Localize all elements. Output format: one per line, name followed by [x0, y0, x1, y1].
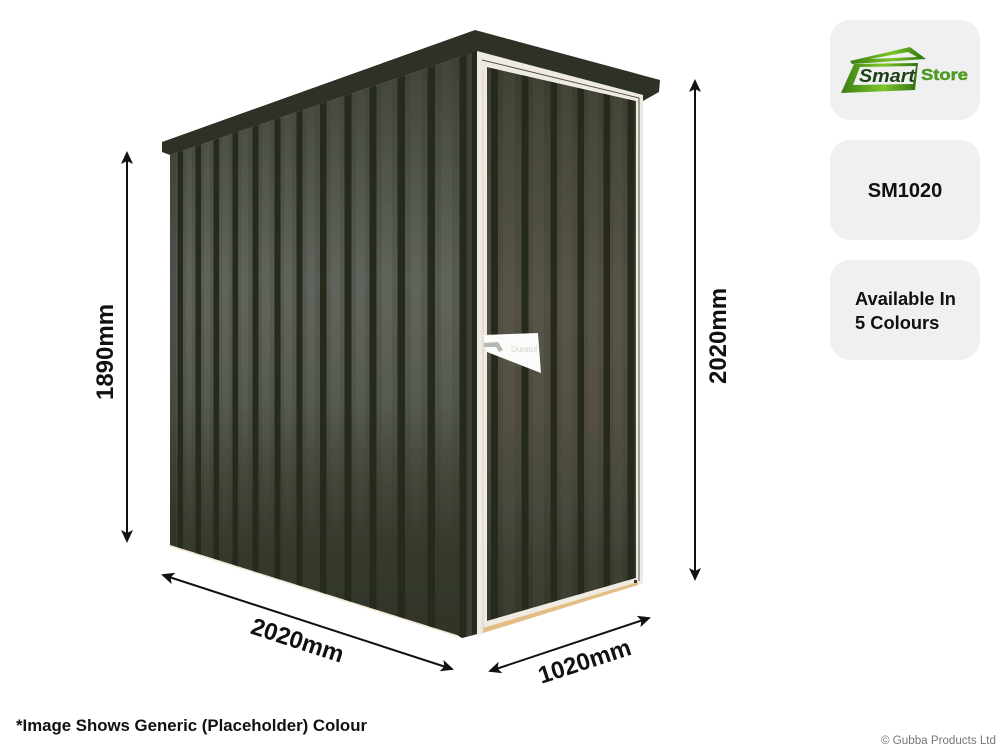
icon: logo house frame — [841, 63, 918, 93]
card: colours available — [830, 260, 980, 360]
shed illustration — [162, 30, 660, 645]
dimension: 1020mm width — [490, 618, 649, 690]
door panel — [487, 67, 636, 621]
roof — [162, 30, 660, 155]
wall corrugation ribs — [178, 50, 477, 645]
copyright: © Gubba Products Ltd — [881, 735, 996, 747]
dimension: 1890mm height: 1890mm — [92, 304, 119, 400]
logo wordmark: Smart: Smart — [859, 65, 916, 86]
door frame — [477, 51, 643, 635]
timber floor strip — [483, 582, 638, 633]
card: model number — [830, 140, 980, 240]
card: colours available: 5 Colours — [855, 312, 939, 333]
icon: logo house roof — [850, 47, 926, 64]
dimension: 1020mm width: 1020mm — [535, 634, 635, 690]
logo wordmark: Store: Store — [921, 67, 968, 84]
shed floor edge — [170, 546, 457, 636]
door handle plate: Duratuf — [511, 345, 538, 354]
card: colours available: Available In — [855, 288, 956, 309]
card: Smart Store logo — [830, 20, 980, 120]
dimension: 2020mm total height: 2020mm — [705, 288, 732, 384]
shed side wall — [165, 50, 480, 645]
dimension: 2020mm length: 2020mm — [247, 613, 347, 669]
dimension: 2020mm length — [163, 575, 452, 669]
footnote: *Image Shows Generic (Placeholder) Colour — [16, 716, 367, 735]
door handle plate — [483, 333, 541, 373]
card: model number: SM1020 — [868, 180, 942, 202]
